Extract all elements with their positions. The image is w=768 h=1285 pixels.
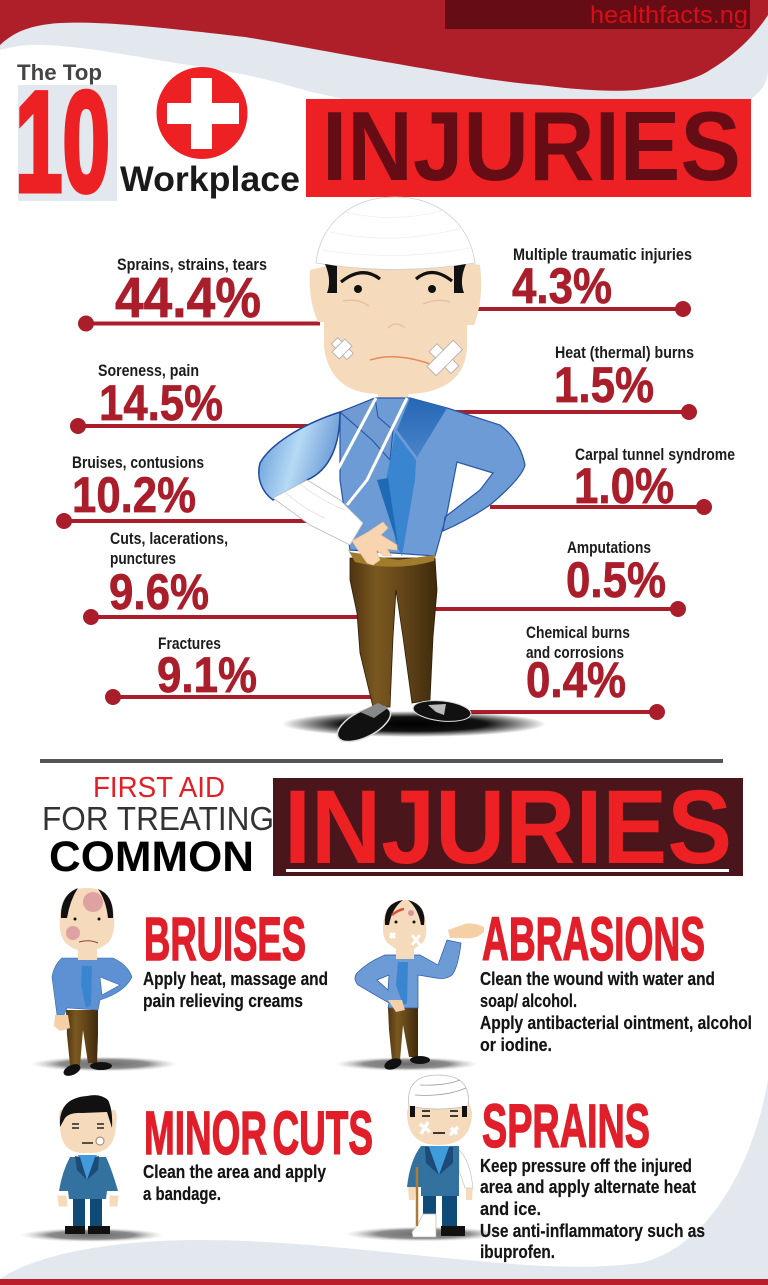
the top label: The Top: [17, 60, 102, 85]
stat: sprains: 44.4%: [115, 266, 261, 330]
stat: soreness: Soreness, pain: [98, 362, 199, 380]
shoes: [332, 698, 472, 749]
stat: multiple traumatic: Multiple traumatic injuries: [513, 246, 692, 264]
bandage on arm: [273, 480, 363, 545]
hair: [325, 264, 466, 293]
stat: fractures: 9.1%: [157, 647, 257, 703]
central injured man illustration: [259, 197, 546, 749]
text: sprains treatment: [480, 1155, 705, 1262]
text: sprains treatment: and ice.: [480, 1198, 541, 1219]
site tag: healthfacts.ng: [445, 0, 750, 29]
stat: chemical burns: 0.4%: [526, 652, 626, 708]
stat: carpal tunnel: [574, 446, 735, 514]
stat: thermal burns: [554, 344, 694, 413]
icon: medical cross: [156, 67, 248, 159]
stat: amputations: Amputations: [567, 539, 651, 557]
stat: bruises: 10.2%: [72, 467, 196, 523]
text: abrasions treatment: or iodine.: [480, 1034, 552, 1055]
bandage dome: [316, 197, 475, 270]
trousers: [350, 558, 437, 707]
stat: thermal burns: Heat (thermal) burns: [555, 344, 694, 362]
text: minor cuts treatment: [143, 1161, 327, 1204]
plasters: [331, 338, 462, 376]
for treating: FOR TREATING: [42, 800, 274, 837]
title: The Top 10 Workplace Injuries: [15, 60, 751, 222]
workplace label: Workplace: [120, 160, 300, 199]
text: abrasions treatment: [480, 968, 752, 1055]
collar and lapels: [340, 398, 447, 556]
stat: chemical burns: [526, 624, 630, 708]
stat: carpal tunnel: 1.0%: [574, 458, 674, 514]
heading: minor cuts: MINOR CUTS: [144, 1099, 373, 1167]
stat: cuts: 9.6%: [109, 564, 209, 620]
stat: sprains: Sprains, strains, tears: [117, 256, 267, 274]
torso and right arm: [340, 398, 525, 556]
stat: thermal burns: 1.5%: [554, 357, 654, 413]
ground shadow: [282, 711, 546, 737]
text: abrasions treatment: Clean the wound with water and: [480, 968, 715, 989]
head: [310, 197, 481, 394]
site tag: healthfacts.ng: healthfacts.ng: [590, 2, 748, 29]
stat: carpal tunnel: Carpal tunnel syndrome: [575, 446, 735, 464]
common: COMMON: [49, 833, 254, 881]
section heading: first aid: [42, 769, 743, 886]
stat: multiple traumatic: 4.3%: [512, 258, 612, 314]
injuries banner dark: INJURIES: [284, 769, 732, 886]
figure: minor cuts man: [20, 1095, 164, 1242]
text: sprains treatment: ibuprofen.: [480, 1241, 555, 1262]
heading: sprains: SPRAINS: [482, 1092, 650, 1160]
mouth: [370, 357, 430, 364]
eyebrows: [341, 272, 452, 282]
text: bruises treatment: pain relieving creams: [143, 990, 303, 1011]
stat: cuts: Cuts, lacerations,: [110, 530, 228, 548]
text: sprains treatment: Use anti-inflammatory such as: [480, 1220, 705, 1241]
divider: [40, 759, 723, 763]
face creases: [343, 300, 450, 328]
text: sprains treatment: Keep pressure off the injured: [480, 1155, 692, 1176]
belt: [347, 548, 435, 567]
stat: cuts: punctures: [110, 550, 176, 568]
text: minor cuts treatment: Clean the area and apply: [143, 1161, 327, 1182]
injuries banner: INJURIES: [322, 91, 741, 201]
number 10: [15, 63, 117, 222]
stat: fractures: Fractures: [158, 635, 221, 653]
figure: abrasions man: [335, 900, 484, 1072]
figure: bruises man: [30, 888, 178, 1078]
figure: sprains man: [345, 1075, 501, 1242]
text: bruises treatment: [143, 968, 328, 1011]
leader lines right: [432, 301, 712, 720]
hand: [352, 522, 397, 565]
eyes: [354, 285, 362, 293]
stat: cuts: [109, 530, 228, 620]
text: minor cuts treatment: a bandage.: [143, 1183, 221, 1204]
neck: [378, 385, 408, 425]
stat: multiple traumatic: [512, 246, 692, 314]
leader lines left: [56, 316, 376, 705]
stat: bruises: Bruises, contusions: [72, 454, 204, 472]
text: sprains treatment: area and apply alternate heat: [480, 1176, 696, 1197]
arm in sling: [259, 412, 340, 500]
text: abrasions treatment: soap/ alcohol.: [480, 990, 577, 1011]
text: bruises treatment: Apply heat, massage and: [143, 968, 328, 989]
sling straps: [327, 398, 407, 505]
stat: amputations: 0.5%: [566, 552, 666, 608]
number 10: 10: [15, 63, 110, 222]
heading: bruises: BRUISES: [144, 905, 306, 973]
stat: chemical burns: Chemical burns: [526, 624, 630, 642]
stat: chemical burns: and corrosions: [526, 644, 624, 662]
first aid: FIRST AID: [93, 772, 225, 804]
stat: soreness: 14.5%: [99, 375, 223, 431]
